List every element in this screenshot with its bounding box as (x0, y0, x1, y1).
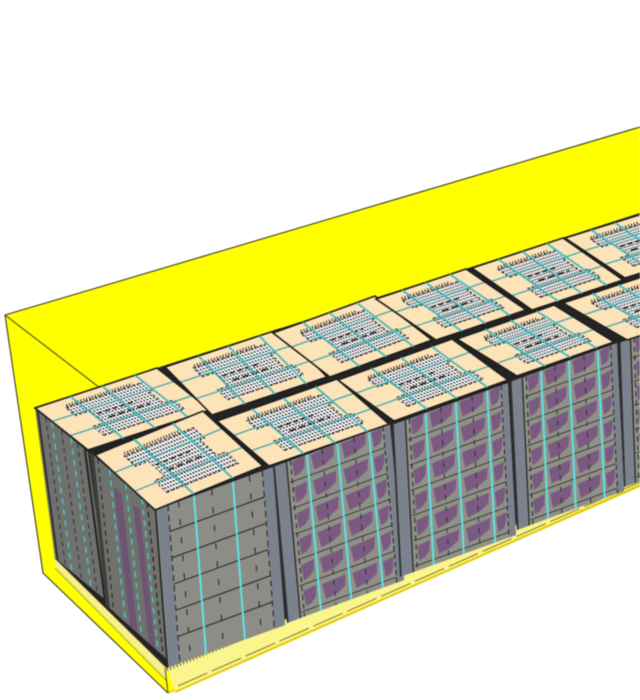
top: back row block 5 (472, 238, 623, 310)
top: front row block 2 (217, 379, 389, 466)
pallet base: pale yellow strip under the cargo (55, 474, 640, 693)
top: front row block 3 (338, 339, 508, 421)
top: front row block 1 (95, 411, 263, 510)
side face: block 5 (619, 307, 640, 487)
left face: rear block (35, 408, 108, 602)
top: back row block 1 (35, 368, 210, 450)
top: back row block 2 (165, 329, 327, 415)
cargo: stacked strapped pallet blocks (35, 210, 640, 668)
left face: front block (90, 452, 171, 663)
side face: block 2 (273, 424, 404, 623)
side face: block 1 (155, 467, 285, 668)
top: back row block 4 (376, 269, 526, 340)
top: front row block 5 (563, 270, 640, 340)
cargo shadow: dark underlay between blocks (35, 213, 640, 668)
top: front row block 4 (457, 305, 614, 376)
side face: block 3 (392, 383, 516, 577)
top: back row block 3 (273, 296, 432, 377)
top: back row block 6 (565, 210, 640, 278)
side face: block 4 (510, 343, 624, 530)
